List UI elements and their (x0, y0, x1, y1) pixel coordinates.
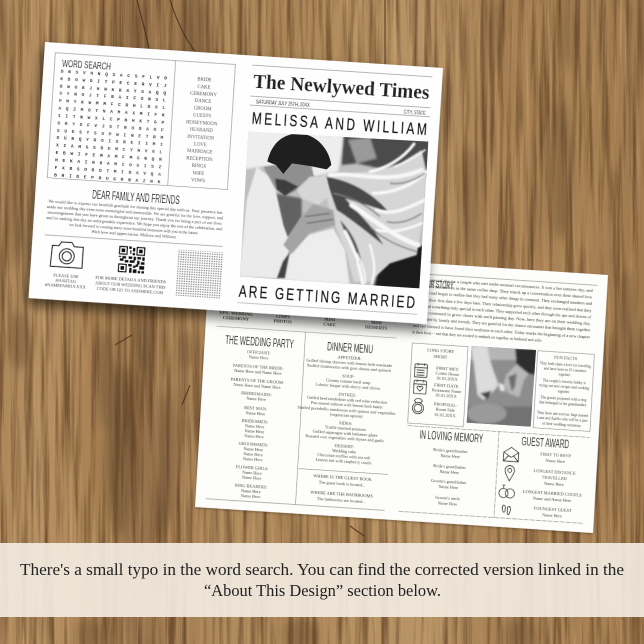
panel: the wedding party: Name Here (241, 488, 261, 494)
panel: fun facts: and have been to 10 countries (544, 367, 587, 373)
panel: fun facts: together. (557, 390, 570, 394)
letter grid: HEKAIRRAMIOSISZ (55, 157, 166, 171)
panel: guest award: LONGEST DISTANCE (533, 468, 576, 476)
letter grid: GUESTSUPWINETRM (57, 128, 168, 141)
masthead rule lines (237, 65, 432, 314)
letter grid: BNSVHNQSACSFLVD (61, 69, 172, 82)
location: CITY, STATE (403, 110, 426, 117)
panel: dinner menu: Wedding cake (332, 448, 356, 454)
panel: guest award: Name Here (544, 481, 564, 487)
letter grid: IITNWXLCPNHKTGP (58, 113, 169, 126)
schedule strip: CEREMONY (223, 315, 250, 322)
flowing hair (322, 144, 427, 283)
photo background (237, 127, 430, 290)
panel: the wedding party: Name Here and Name Here (233, 382, 281, 390)
caption: wedding website: FOR MORE DETAILS AND FRIENDS (95, 275, 167, 284)
panel: dinner menu: Truffle mashed potatoes (325, 424, 367, 432)
guest book and bathrooms notes: WHERE ARE THE BATHROOMS (310, 489, 374, 499)
welcome message: we look forward to creating many more beautiful memories with you in the future. (69, 222, 199, 235)
panel: the wedding party: OFFICIANT: (247, 349, 271, 356)
schedule strip: DESSERTS (365, 324, 388, 331)
panel: dinner menu (294, 340, 400, 467)
panel: dinner menu: Grilled beef tenderloin with red wine reduction (307, 395, 388, 405)
heading: our story: OUR STORY (422, 279, 454, 292)
letter grid: FXBSOBDTMIDAVQA (54, 165, 166, 178)
panel: dinner menu: Grilled asparagus with balsamic glaze (313, 428, 378, 438)
panel: the wedding party: Name Here (243, 451, 263, 457)
letter grid: SYNOJTFBAIFONSL (59, 91, 170, 104)
panel: guest award: TRAVELLED (542, 474, 567, 481)
schedule strip: LIMPS (276, 314, 291, 319)
masthead: the newlywed times: The Newlywed Times (253, 71, 430, 104)
caption: hashtag: PLEASE USE (53, 273, 79, 279)
welcome message: With love and appreciation, Melissa and William (91, 229, 177, 240)
panel: dinner menu: SIDES: (339, 420, 353, 426)
panel: in loving memory: IN LOVING MEMORY (419, 429, 484, 446)
panel: dinner menu: APPETIZER: (337, 355, 362, 361)
photo: couple kissing (237, 127, 433, 290)
caption: wedding website: CODE OR GO TO ANISHERE.COM (97, 286, 164, 295)
heading: the wedding party: THE WEDDING PARTY (225, 335, 294, 351)
panel: fun facts: They both share a love for traveling (540, 361, 591, 369)
panel: in loving memory: Groom's grandfather (431, 478, 467, 485)
panel: long story short: Coffee House (436, 371, 459, 377)
welcome message: encouragement that you have given us throughout our journey. Thank you for being a part of our lives (47, 209, 222, 226)
welcome message: We would like to express our heartfelt gratitude for sharing this special day with us. Your presence has (48, 198, 223, 215)
word list: MARRIAGE (187, 149, 213, 156)
panel: dinner menu: Roasted root vegetables with thyme and garlic (305, 433, 385, 443)
panel: dinner menu: ENTREE: (338, 392, 356, 398)
panel: dinner menu: SOUP: (342, 374, 355, 379)
panel: fun facts: FUN FACTS (554, 355, 578, 361)
letter grid: BWOKJHWKKSYSAQQ (60, 83, 171, 97)
letter grid (54, 69, 172, 185)
panel: in loving memory: Bride's grandmother (433, 447, 469, 454)
panel: long story short: Restaurant Name (432, 387, 461, 394)
panel: the wedding party: RING BEARERS: (235, 483, 268, 490)
panel: fun facts: The groom proposed with a ring (540, 396, 587, 403)
icon: map pin (504, 465, 515, 481)
panel: dinner menu: (vegetarian option) (330, 411, 363, 419)
caption: wedding website: ABOUT OUR WEDDING SCAN THIS (95, 280, 166, 290)
dotted letter puzzle (176, 250, 223, 298)
letter grid: EBWIFEMAMFMGNQR (55, 150, 167, 163)
schedule strip (206, 310, 398, 510)
panel: dinner menu: Grilled shrimp skewers with lemon-herb marinade (306, 358, 392, 368)
panel: dinner menu: Pan-seared salmon with lemon herb butter (311, 400, 384, 410)
schedule strip: PHOTOS (274, 318, 292, 325)
panel: fun facts: The couple's favorite hobby is (543, 379, 587, 386)
panel: guest award: FIRST TO RSVP (540, 451, 572, 458)
letter grid: XIAHGSBEMCYNVGL (56, 143, 167, 156)
welcome message: and for making this day an unforgettable experience. We hope you enjoy the rest of the celebration, and (46, 215, 223, 232)
panel: in loving memory (415, 429, 484, 508)
panel: guest award (498, 435, 585, 520)
story paragraph: planned their first date a few days later. Their relationship grew quickly, and they soon realized that they (414, 296, 592, 314)
caption: hashtag: #NAMEFAMILY.XXX (45, 282, 87, 290)
notice text (20, 560, 624, 600)
panel: the wedding party (216, 335, 294, 501)
panel: in loving memory: Name Here (438, 484, 458, 490)
letter grid: ORYGFVJSTROBAOF (57, 120, 169, 134)
letter grid: PMYKWMMFCRHLDSL (59, 98, 170, 111)
panel: the wedding party: FLOWER GIRLS: (236, 464, 269, 471)
word list: VOWS (191, 178, 205, 184)
panel: guest award: Name and Name Here (533, 495, 571, 503)
icon: camera (50, 241, 84, 268)
word list: HUSBAND (190, 128, 213, 134)
panel: fun facts: trying out new recipes and cooking (539, 383, 589, 391)
panel: the wedding party: Name Here (241, 493, 261, 499)
panel: dinner menu: Stuffed portobello mushroom with quinoa and vegetables (297, 404, 396, 416)
letter grid: OUNQYROISREIIMI (56, 135, 168, 148)
panel: guest award: Name Here (545, 458, 565, 464)
story paragraph (412, 276, 593, 346)
panel: dinner menu: Lemon tart with raspberry coulis (315, 457, 372, 465)
welcome message: made our wedding day even more meaningful and memorable. We are grateful for the love, support, and (47, 204, 224, 221)
schedule strip: CAKE (323, 322, 336, 327)
panel: long story short: FIRST DATE: (434, 383, 460, 389)
panel: guest award: LONGEST MARRIED COUPLE (523, 489, 582, 498)
word list: CEREMONY (190, 92, 218, 98)
panel: long story short: LONG STORY (427, 348, 455, 354)
panel: fun facts: that belonged to his grandmother. (539, 400, 587, 408)
panel: long story short (408, 343, 468, 427)
panel: fun facts: Luna and Apollo who will be a part (537, 416, 588, 423)
panel: guest award: YOUNGEST GUEST (533, 506, 572, 513)
icon: calendar with heart (413, 379, 427, 394)
word list: GUESTS (193, 113, 212, 120)
headline: names: MELISSA AND WILLIAM (251, 110, 427, 140)
word list: RECEPTION (186, 156, 213, 163)
word list: CAKE (197, 85, 211, 91)
panel: in loving memory: Name Here (439, 469, 459, 475)
headline: are getting married: ARE GETTING MARRIED (238, 283, 416, 313)
word list: HONEYMOON (186, 120, 218, 127)
story paragraph: It was a special day for a couple who met under unusual circumstances. It was a hot summer day, and (415, 276, 593, 294)
panel: long story short: 01.01.20XX (436, 376, 459, 382)
date line: SATURDAY JULY 25TH, 20XX (256, 99, 310, 109)
story paragraph: they found themselves in the same coffee shop. They struck up a conversation over their shared love (415, 283, 592, 300)
heading: word search: WORD SEARCH (62, 59, 111, 73)
story paragraph: and feel blessed to have found their soulmate in each other. Today marks the beginning of a new chapter (413, 323, 591, 339)
panel: dinner menu: Stuffed mushrooms with goat cheese and spinach (307, 363, 392, 373)
panel: the wedding party: Name Here (243, 446, 263, 452)
schedule strip: MINI (371, 320, 382, 325)
heading: dinner menu: DINNER MENU (327, 341, 373, 356)
letter grid: KBOWDITPECERVIJ (60, 76, 171, 89)
schedule strip: MINI (324, 317, 336, 322)
caption: hashtag (45, 272, 87, 290)
man and woman (239, 160, 349, 284)
panel: the wedding party: Name Here and Name Here (234, 368, 282, 376)
letter grid: AQZMOTNAMAXMIFK (58, 106, 169, 119)
word list: DANCE (195, 99, 211, 105)
panel: the wedding party: Name Here (246, 410, 265, 416)
word list: GROOM (194, 106, 212, 112)
panel: the wedding party: Name Here (246, 396, 266, 402)
panel: the wedding party: BRIDESMAIDS: (241, 391, 272, 398)
panel: long story short: 01.01.20XX (434, 412, 457, 418)
back sheet: program inside (195, 249, 608, 533)
icon: engagement ring (412, 398, 424, 414)
panel: the wedding party: BEST MAN: (244, 405, 267, 411)
icon: calendar (414, 363, 428, 378)
guest book and bathrooms notes: WHERE IS THE GUEST BOOK (313, 473, 373, 482)
panel: long story short: SHORT (433, 354, 448, 360)
letter grid: BRIDEPRUGRNAZRK (54, 172, 165, 185)
word list (182, 77, 221, 185)
story paragraph: of coffee and began to realize that they had many other things in common. They exchanged numbers and (415, 290, 593, 306)
panel: fun facts (533, 351, 594, 431)
panel: in loving memory: Bride's grandfather (433, 463, 467, 470)
icon: qr code (118, 246, 146, 274)
panel: in loving memory: Groom's uncle (435, 495, 460, 501)
panel: the wedding party: Name Here (243, 456, 263, 462)
welcome message (45, 198, 224, 243)
panel: the wedding party: Name Here (249, 354, 269, 361)
panel: the wedding party: Name Here (245, 423, 265, 429)
panel: long story short: Room Side (436, 407, 455, 413)
guest book and bathrooms notes: The bathrooms are located... (317, 496, 366, 504)
panel: the wedding party: Name Here (244, 428, 264, 434)
icon: baby feet (502, 505, 511, 515)
panel: fun facts: together. (558, 373, 571, 377)
panel: the wedding party: GROOMSMEN: (239, 441, 269, 448)
word list: INVITATION (187, 135, 215, 142)
icon: envelope (503, 447, 519, 462)
panel: fun facts: of their wedding ceremony. (542, 421, 582, 428)
panel: guest award: GUEST AWARD (521, 436, 570, 451)
panel: dinner menu: DESSERT: (334, 443, 354, 449)
guest book and bathrooms notes (310, 473, 375, 505)
panel: in loving memory: Name Here (440, 453, 460, 459)
panel: our story (405, 273, 597, 346)
story paragraph: in their lives -- one that they are excited to embark on together as husband and wife. (412, 329, 542, 343)
panel: word search (47, 53, 235, 189)
guest book and bathrooms notes: The guest book is located... (319, 479, 366, 488)
caption: wedding website (95, 275, 167, 295)
panel: dinner menu: Lobster bisque with sherry and chives (315, 382, 381, 391)
panel: in loving memory: Name Here (438, 500, 457, 507)
panel: the wedding party: BRIDESMEN: (242, 418, 268, 424)
panel: the wedding party: Name Here (244, 433, 264, 439)
panel: dinner menu: Creamy tomato basil soup (326, 378, 371, 385)
word list: WIFE (192, 171, 204, 177)
notice banner (0, 543, 644, 617)
word list: LOVE (194, 142, 207, 148)
panel: the wedding party: Name Here (242, 469, 262, 476)
front sheet: newspaper cover (29, 42, 443, 324)
panel: the wedding party: PARENTS OF THE GROOM: (230, 377, 284, 385)
story paragraph: had found something truly special in each other. They supported each other through the ups and downs of (414, 303, 592, 319)
schedule strip: EPIC WEDDING (219, 310, 254, 317)
panel: the wedding party: Name Here (242, 474, 262, 481)
icon: wedding rings (499, 485, 515, 498)
panel: long story short: FIRST MET: (436, 366, 459, 372)
panel: the wedding party: PARENTS OF THE BRIDE: (233, 363, 283, 371)
photo: holding hands (466, 346, 536, 427)
word list: BRIDE (197, 78, 212, 84)
panel: long story short: 01.01.20XX (435, 393, 458, 399)
panel: fun facts: They have one son/cat, Sage named (537, 411, 588, 419)
notice text: There's a small typo in the word search. You can find the corrected version linked in the (20, 560, 624, 579)
story paragraph: life and continued to grow closer with each passing day. Now, here they are on their wedding day, (413, 309, 591, 327)
man's hair (267, 133, 331, 174)
heading: dear family and friends: DEAR FAMILY AND FRIENDS (92, 189, 180, 207)
panel: dinner menu: Chocolate truffles with sea salt (317, 452, 371, 460)
story paragraph: surrounded by family and friends. They are grateful for the chance encounter that brought them together (413, 316, 591, 333)
caption: hashtag: HASHTAG (55, 278, 77, 284)
notice text: “About This Design” section below. (204, 581, 441, 600)
panel: guest award: Name Here (542, 512, 562, 518)
word list: RINGS (192, 164, 207, 170)
panel: long story short: PROPOSAL: (434, 402, 458, 408)
